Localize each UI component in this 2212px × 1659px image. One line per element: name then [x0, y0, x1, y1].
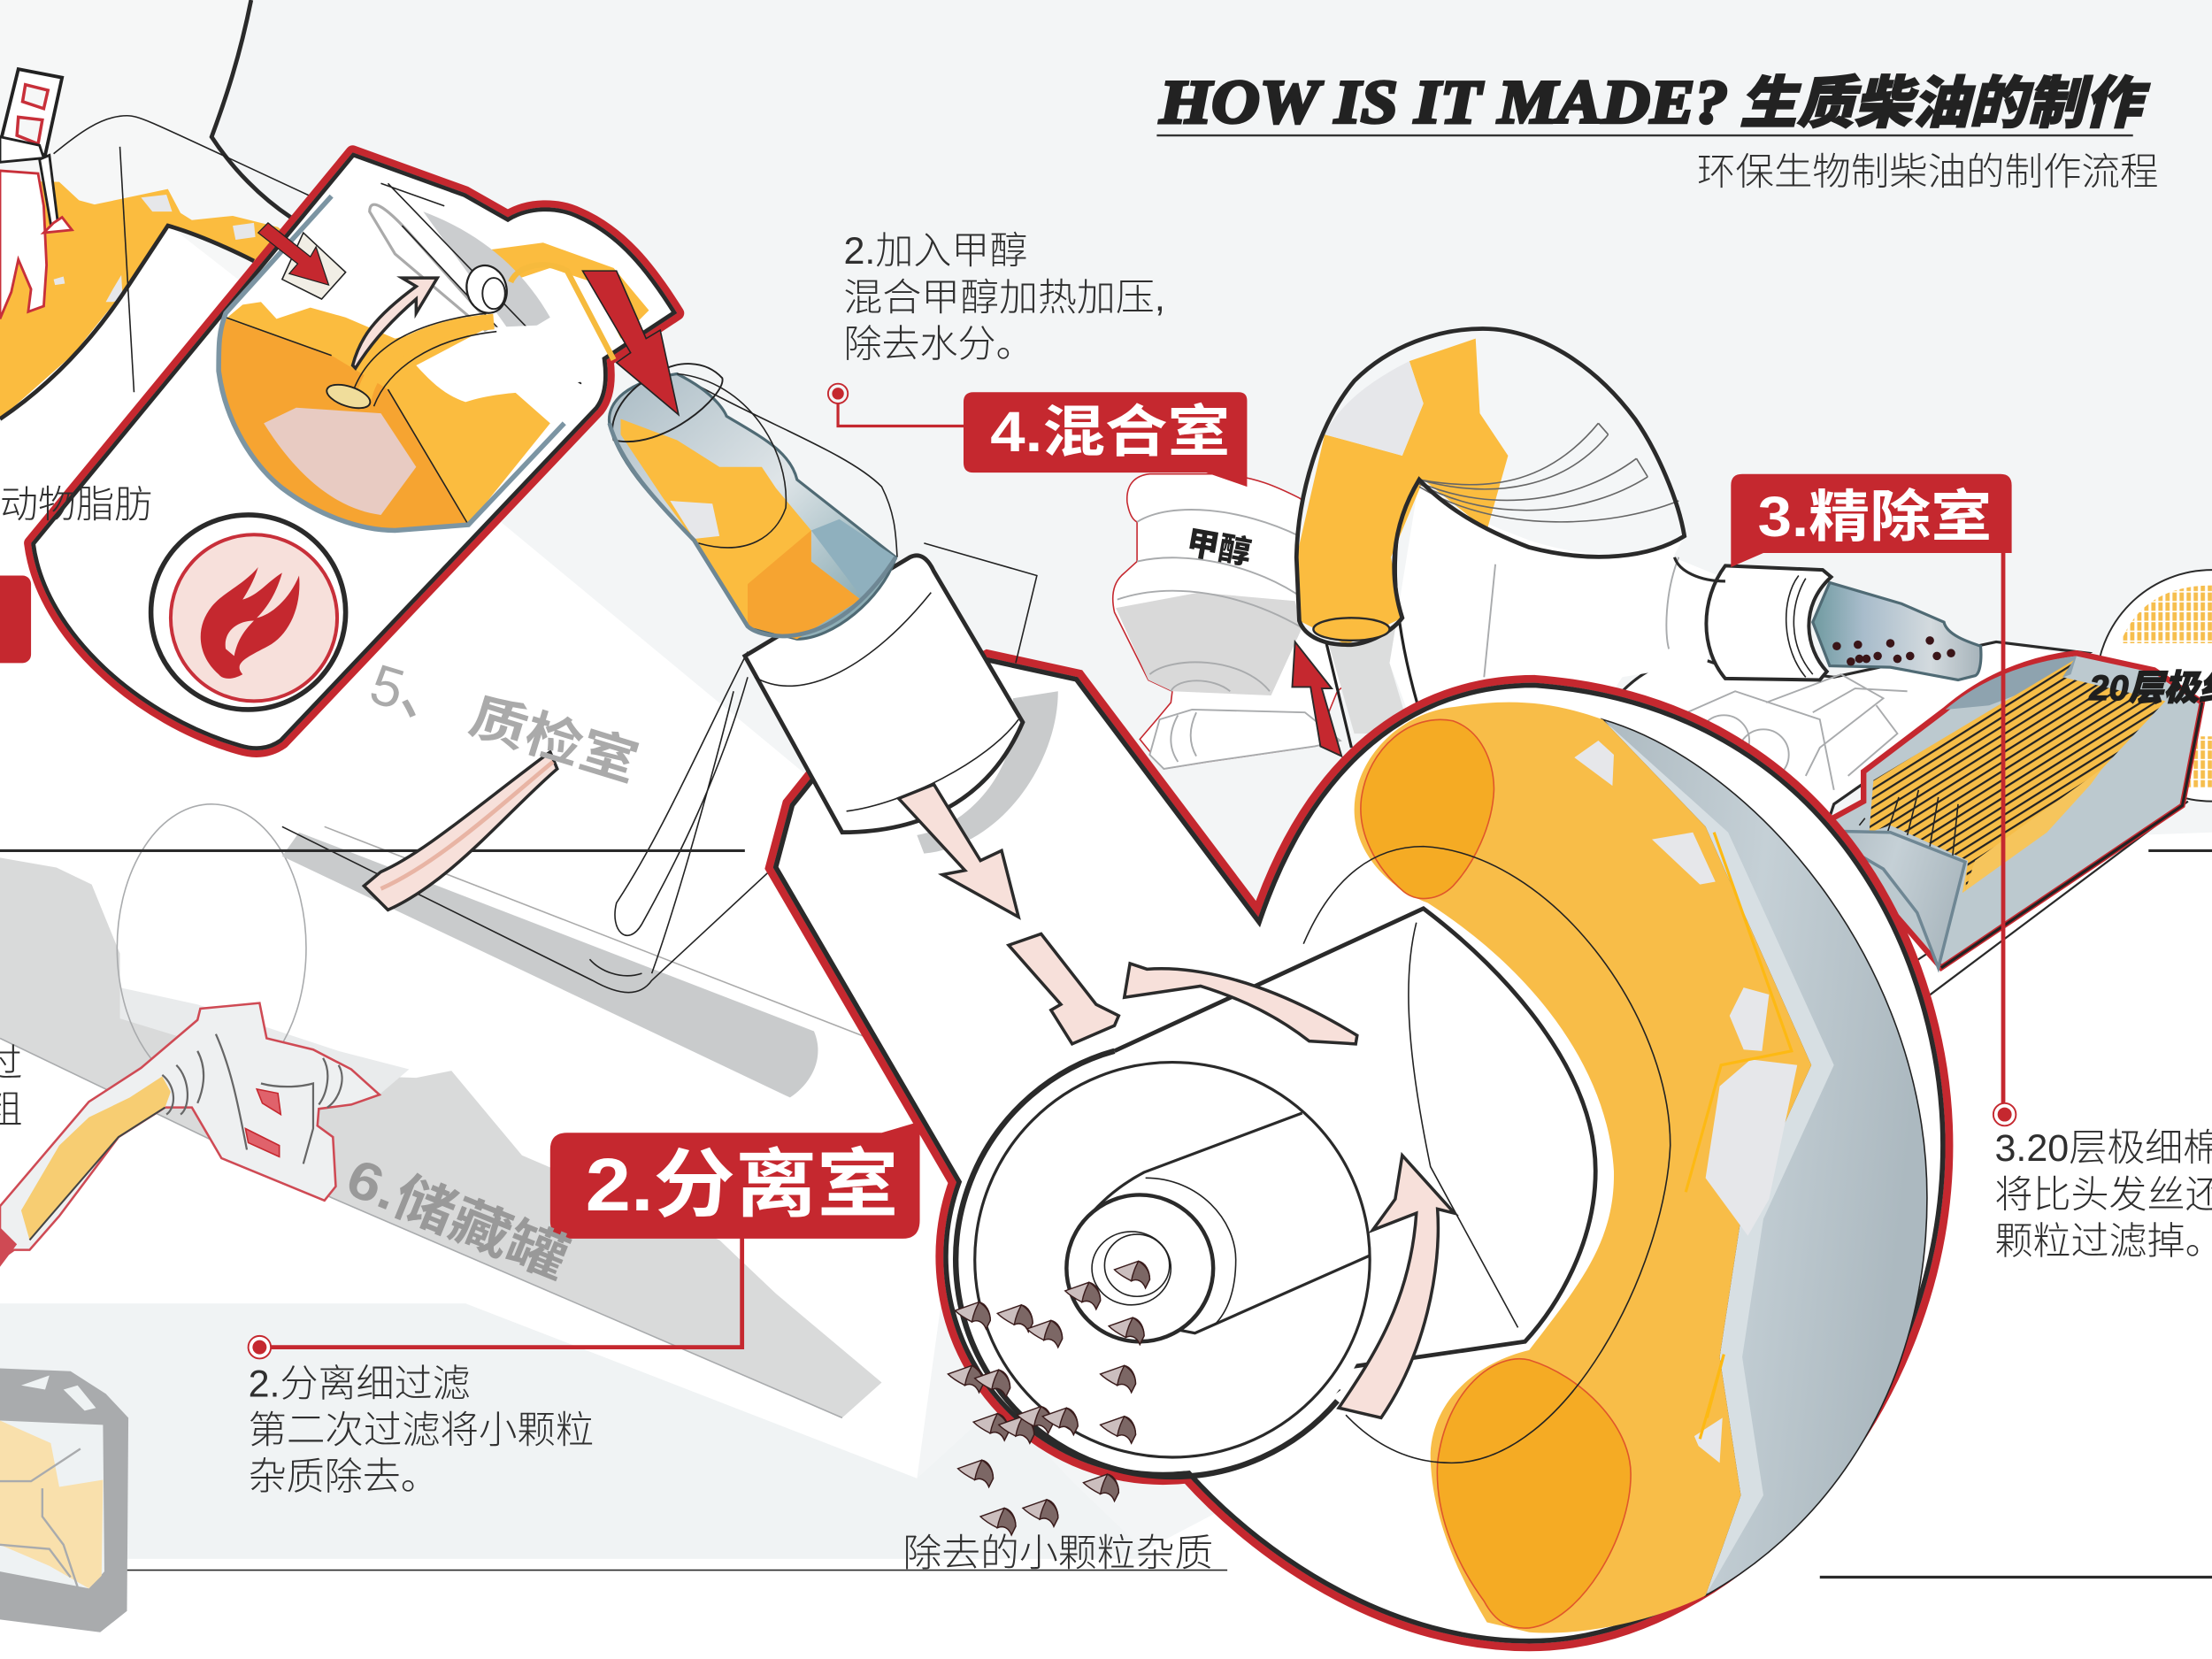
outlet inner ring: [482, 278, 505, 309]
grey crescent: [1602, 719, 1927, 1595]
shell red edge: [773, 657, 1946, 1643]
label: removed particles: 除去的小颗粒杂质: [902, 1532, 1213, 1575]
can handle gaps: [21, 1376, 96, 1410]
refining tube: [1813, 582, 1981, 680]
heading latin: HOW IS IT MADE?: [1159, 68, 1728, 137]
fuel nozzle: [0, 1003, 380, 1267]
text: step 4 note: 除去水分。: [843, 323, 1034, 365]
methanol bottle: [1113, 474, 1355, 769]
body under dome: [1389, 480, 1725, 719]
text: step 4 note: 混合甲醇加热加压,: [843, 277, 1165, 319]
text: clipped left note: [0, 1043, 22, 1132]
machine outer shell: [773, 657, 1946, 1643]
bottle pipe connectors: [1171, 712, 1196, 762]
jagged accent line: [1686, 833, 1792, 1439]
shaft end: [1066, 1194, 1213, 1341]
pipe lower rim: [847, 719, 1018, 811]
grey patch: [670, 501, 719, 539]
liquid orange: [219, 319, 468, 529]
bottle shape: [609, 374, 895, 639]
machine sketch behind: [1623, 641, 2088, 847]
quality-check strip: [282, 833, 818, 1097]
thin outline of hump: [54, 116, 311, 196]
badge outer: [151, 515, 346, 710]
label: 6 storage tank: 6.储藏罐: [339, 1147, 577, 1290]
lower arc: [1203, 1389, 1340, 1450]
spout liquid: [480, 242, 649, 339]
fat highlights: [54, 195, 256, 302]
top glass ring: [612, 364, 723, 442]
pipe body: [745, 556, 1023, 833]
bottom lobe: [1437, 1359, 1631, 1628]
refining cylinder: [1706, 565, 1832, 680]
housing far edge: [1941, 703, 2202, 968]
background: white diagonal zone: [0, 226, 959, 1479]
tag: 2 separation room: 2.分离室: [586, 1143, 899, 1226]
inner thin arc: [1303, 847, 1671, 1463]
body sketch lines: [1484, 557, 1678, 677]
subheading: 环保生物制柴油的制作流程: [1697, 151, 2158, 194]
pipe shadow: [917, 691, 1058, 854]
can body: [0, 1369, 128, 1632]
pipe opening: [324, 380, 373, 413]
nozzle body: [0, 1003, 380, 1260]
drum inner ring: [975, 1063, 1370, 1457]
feed pipe into machine: [677, 374, 1058, 854]
thin vertical line: [120, 147, 134, 392]
bottle rib lines: [1118, 510, 1305, 691]
icon: cow: [0, 171, 47, 319]
shell inner: [773, 657, 1946, 1643]
detail circle at right: [2096, 570, 2212, 802]
methanol label: 甲醇: [1184, 525, 1254, 572]
end cap: [1827, 831, 1965, 968]
small tube under dome: [1326, 621, 1410, 733]
bowl edge: [0, 226, 254, 419]
pitcher inner: [31, 152, 677, 750]
sketch envelope: [677, 374, 897, 557]
arrow: pitcher to bottle: [582, 271, 679, 415]
top lobe: [1361, 719, 1494, 899]
glass bottle: [609, 364, 895, 639]
tank seams: [226, 318, 468, 525]
panel: pitcher container: [31, 152, 677, 750]
dome grey patch: [1325, 361, 1424, 456]
orange liquid: [748, 530, 861, 639]
background: lower grey band: [0, 1303, 1153, 1559]
outer rim: [610, 423, 895, 636]
leader: step 2: [249, 1234, 742, 1358]
white cut: [416, 325, 586, 402]
outer sketch rectangle: [924, 543, 1037, 663]
housing top cap: [1946, 656, 2077, 710]
thin blade lines: [380, 183, 581, 384]
text: step 2 note: [249, 1363, 594, 1499]
dome fill: [1296, 328, 1685, 645]
tank body: [0, 857, 881, 1417]
text: step 2 note: 2.分离细过滤: [249, 1363, 471, 1405]
storage tank 6: [0, 804, 881, 1417]
horizontal rule bottom: [0, 1570, 1227, 1571]
icon: flame badge: [151, 515, 346, 710]
text: step 4 note: 2.加入甲醇: [843, 230, 1027, 273]
horizontal rule upper: [0, 849, 745, 851]
leader: step 4: [828, 384, 965, 426]
debris in tube: [1832, 636, 1955, 666]
nozzle details: [162, 1034, 342, 1164]
label: 5 quality room: [363, 651, 646, 794]
tag: 4 mixing room: 4.混合室: [990, 400, 1230, 464]
debris particles: [948, 1261, 1149, 1535]
hose edge: [29, 1108, 165, 1240]
arrow: drum top curved: [1125, 964, 1357, 1044]
bottle feed pipe: [1149, 710, 1340, 769]
background: lower white zone: [0, 833, 2212, 1659]
text: step 2 note: 杂质除去。: [249, 1456, 439, 1499]
cone edges: [1115, 909, 1595, 1369]
dome yellow liquid: [1296, 339, 1508, 645]
hose end: [0, 1227, 17, 1267]
rim: [219, 196, 565, 530]
arrow: pipe to drum upper: [899, 784, 1018, 917]
thin blade loop: [370, 204, 494, 332]
yellow fat bowl: [0, 0, 311, 419]
pipe inner rim: [755, 593, 931, 686]
filter sheet teeth: [1859, 790, 1958, 857]
inner arch pipe: [364, 322, 494, 398]
hose liquid: [21, 1077, 171, 1240]
filter housing back lines: [1623, 641, 2188, 1004]
inner arch outlines: [353, 313, 496, 406]
blue patch: [811, 519, 895, 600]
white hub cone: [1115, 909, 1595, 1376]
tank highlight: [120, 987, 409, 1094]
label: 5 quality room: 5、: [363, 651, 465, 738]
arrow: inner pink curve: [353, 278, 437, 368]
separation drum: [956, 1048, 1384, 1477]
can liquid: [0, 1421, 103, 1588]
drum outer arc: [956, 1051, 1337, 1477]
dome fan lines: [1419, 423, 1678, 522]
yellow ring: [1355, 703, 1811, 1633]
refining chamber cylinder: [1675, 557, 1981, 680]
connecting shoulder: [1675, 557, 1725, 581]
label: 5 quality room: 质检室: [463, 688, 644, 793]
yellow liquid: [621, 419, 861, 639]
leader: step 3: [1993, 553, 2016, 1125]
text: step 3 note: [1994, 1127, 2212, 1263]
can lines: [0, 1448, 81, 1587]
jerrycan: [0, 1369, 128, 1632]
arrow: drum right curved: [1339, 1156, 1455, 1417]
bottle grey fill: [1116, 593, 1302, 695]
arrow: into pitcher: [258, 223, 328, 285]
trigger: [245, 1089, 280, 1156]
shaft rings: [1092, 1232, 1171, 1305]
text: step 2 note: 第二次过滤将小颗粒: [249, 1409, 594, 1452]
glass sketch arc: [677, 374, 786, 548]
icon: chair: [0, 69, 72, 233]
liquid pink: [264, 408, 416, 515]
flame: [201, 567, 299, 679]
refining inner rim: [1786, 576, 1813, 677]
spout pipe inner: [511, 265, 614, 360]
background: top-left panel: [0, 0, 423, 451]
tag: 4 mixing room: [964, 392, 1247, 487]
cone thin arcs: [1409, 923, 1518, 1327]
liquid yellow: [219, 302, 550, 529]
heading underline: [1156, 134, 2133, 136]
tank end ellipse: [117, 804, 306, 1092]
fat liquid: [0, 180, 303, 419]
shaft thin arc: [1146, 1178, 1236, 1325]
inlet pipe stub: [282, 233, 346, 299]
heading: [1156, 68, 2158, 194]
top-left boundary curve: [211, 0, 290, 218]
light yellow splash: [1962, 769, 2102, 893]
tag: 2 separation room: [550, 1122, 920, 1239]
text: step 4 note: [843, 230, 1165, 365]
arrow: pipe to drum lower: [1009, 933, 1118, 1044]
grey back shadow: [423, 211, 550, 339]
housing body: [1820, 653, 2202, 968]
label: animal fat: 动物脂肪: [0, 484, 152, 526]
dome outline: [1296, 328, 1685, 645]
heading chinese: 生质柴油的制作: [1740, 72, 2151, 135]
filter sheets: [1870, 660, 2165, 892]
quality-check outline sketch: [282, 652, 869, 1038]
dome chamber: [1296, 328, 1725, 748]
arrow: methanol up: [1292, 641, 1341, 757]
pitcher red outline: [31, 152, 677, 750]
outlet rings: [461, 261, 512, 318]
tag: 3 refining room: 3.精除室: [1758, 485, 1992, 549]
ice-like patches: [1574, 741, 1797, 1463]
dome mouth ellipse: [1313, 618, 1389, 641]
tag: 3 refining room: [1731, 474, 2012, 567]
badge inner: [171, 534, 337, 701]
red tag remnant: [0, 576, 31, 663]
shaft body: [1072, 1113, 1370, 1333]
horizontal rule right: [2148, 849, 2212, 851]
light edge band: [1602, 719, 1834, 1595]
horizontal rule bottom right: [1820, 1577, 2212, 1578]
arrow: quality check: [364, 752, 557, 910]
tube lines: [1326, 480, 1417, 748]
can window: [0, 1421, 104, 1588]
drum face: [961, 1048, 1384, 1471]
tank lower edge: [0, 1038, 842, 1417]
filter housing: 20 layers: [1820, 653, 2202, 968]
bottle outline: [1113, 474, 1355, 769]
